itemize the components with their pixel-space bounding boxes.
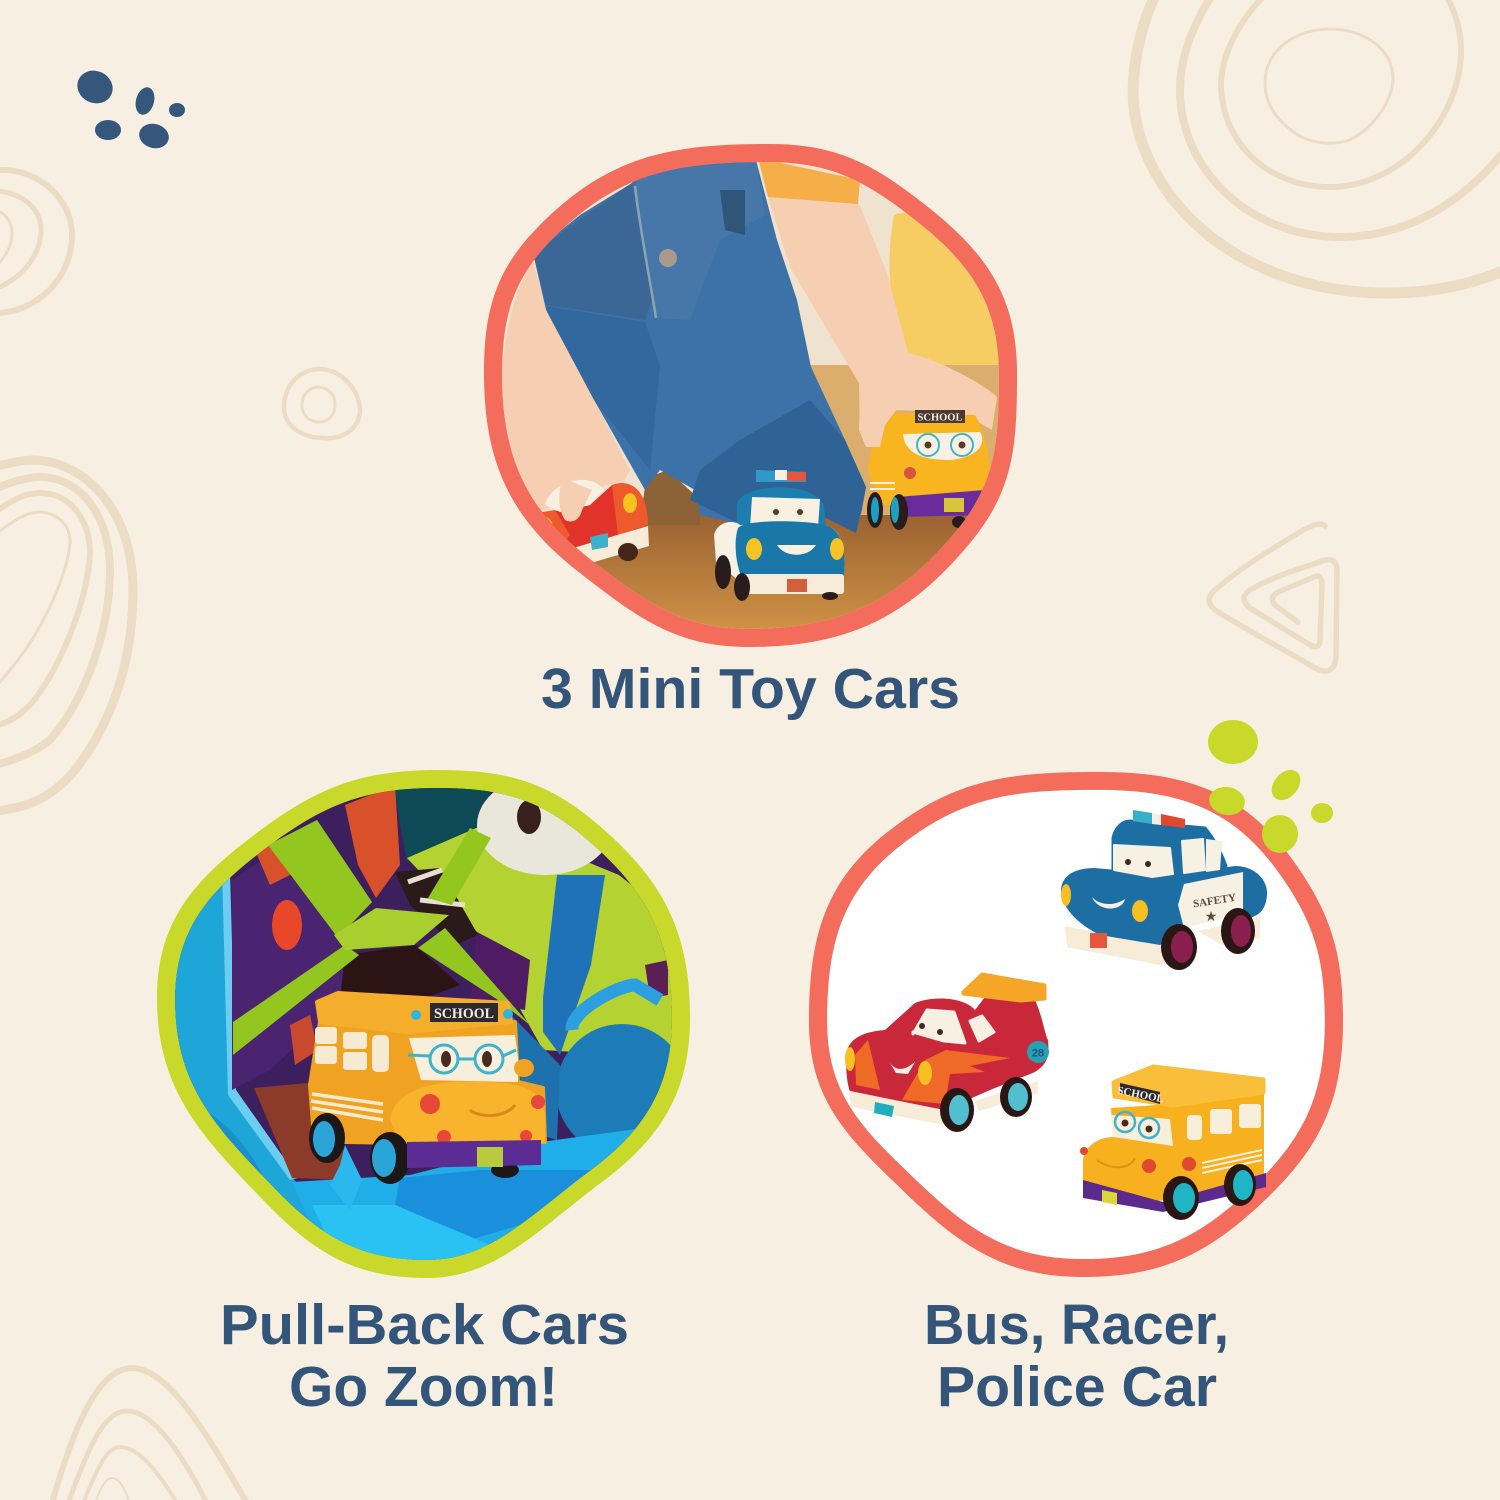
- purple plush and red spots: [232, 855, 345, 1090]
- heading: pull-back cars go zoom: Go Zoom!: [289, 1355, 558, 1419]
- bus stripes: [311, 1094, 383, 1120]
- ramp: [292, 1129, 635, 1260]
- school bus: SCHOOL: [1116, 1085, 1165, 1105]
- ring: top coral border: [484, 144, 1017, 647]
- ring: green border: [157, 770, 690, 1278]
- panel: 3 mini toy cars photo: [502, 162, 999, 629]
- bus bumper: [407, 1140, 541, 1168]
- bus glasses: [408, 1045, 516, 1073]
- icon: green dots: [1207, 720, 1333, 853]
- police text: SAFETY: [1192, 892, 1237, 910]
- orange sleeve: [758, 158, 860, 204]
- bus wheels: [309, 1113, 345, 1163]
- decorative contour: small ring: [284, 369, 360, 438]
- decorative contour: top right: [1133, 0, 1500, 293]
- school bus toy: SCHOOL: [434, 1006, 494, 1022]
- blue round toy: [558, 1024, 670, 1155]
- racer car: [845, 974, 1049, 1132]
- lime jacket: [407, 828, 672, 1058]
- racer number: [1027, 1041, 1049, 1063]
- jeans: [533, 160, 866, 533]
- racer wheels: [940, 1088, 974, 1132]
- orange strip: [345, 785, 400, 898]
- police car: [1061, 810, 1267, 970]
- racer car: 28: [1032, 1048, 1044, 1060]
- right arm and hand: [768, 197, 997, 447]
- panel: bus racer police cars: [827, 790, 1325, 1259]
- dark fur: [340, 945, 460, 1000]
- strap buckle: [334, 908, 449, 950]
- ring: coral border bottom right: [809, 772, 1343, 1277]
- yellow school toy bus: SCHOOL: [918, 412, 962, 424]
- green straps: [233, 820, 530, 1055]
- police wheels: [1161, 924, 1197, 970]
- left arm and hand: [500, 260, 630, 515]
- decorative contour: upper left: [0, 170, 72, 313]
- school bus toy: [309, 993, 545, 1184]
- blue police toy car: [714, 470, 844, 601]
- yellow school toy bus: [867, 410, 990, 530]
- heading: pull-back cars go zoom: [220, 1293, 629, 1419]
- zipper: [543, 875, 605, 1055]
- decorative contour: left large: [0, 460, 133, 811]
- heading: bus racer police car: Bus, Racer,: [924, 1293, 1229, 1357]
- school bus: [1080, 1066, 1266, 1220]
- bus windows: [315, 1027, 389, 1072]
- bus sign: [430, 1003, 498, 1022]
- heading: 3 mini toy cars: 3 Mini Toy Cars: [541, 657, 960, 721]
- decorative contour: right triangle: [1209, 524, 1337, 671]
- heading: pull-back cars go zoom: Pull-Back Cars: [220, 1293, 629, 1357]
- thumb over bus: [859, 410, 896, 447]
- heading: bus racer police car: Police Car: [937, 1355, 1217, 1419]
- red toy car: [542, 480, 649, 562]
- police car: ★: [1205, 909, 1217, 925]
- heading: bus racer police car: [924, 1293, 1229, 1419]
- zebra plush: [395, 868, 478, 945]
- decorative contour: bottom left: [52, 1368, 247, 1500]
- icon: dark blue dots: [72, 65, 185, 151]
- panel: pull-back cars photo: [175, 788, 672, 1260]
- panda plush: [477, 792, 602, 875]
